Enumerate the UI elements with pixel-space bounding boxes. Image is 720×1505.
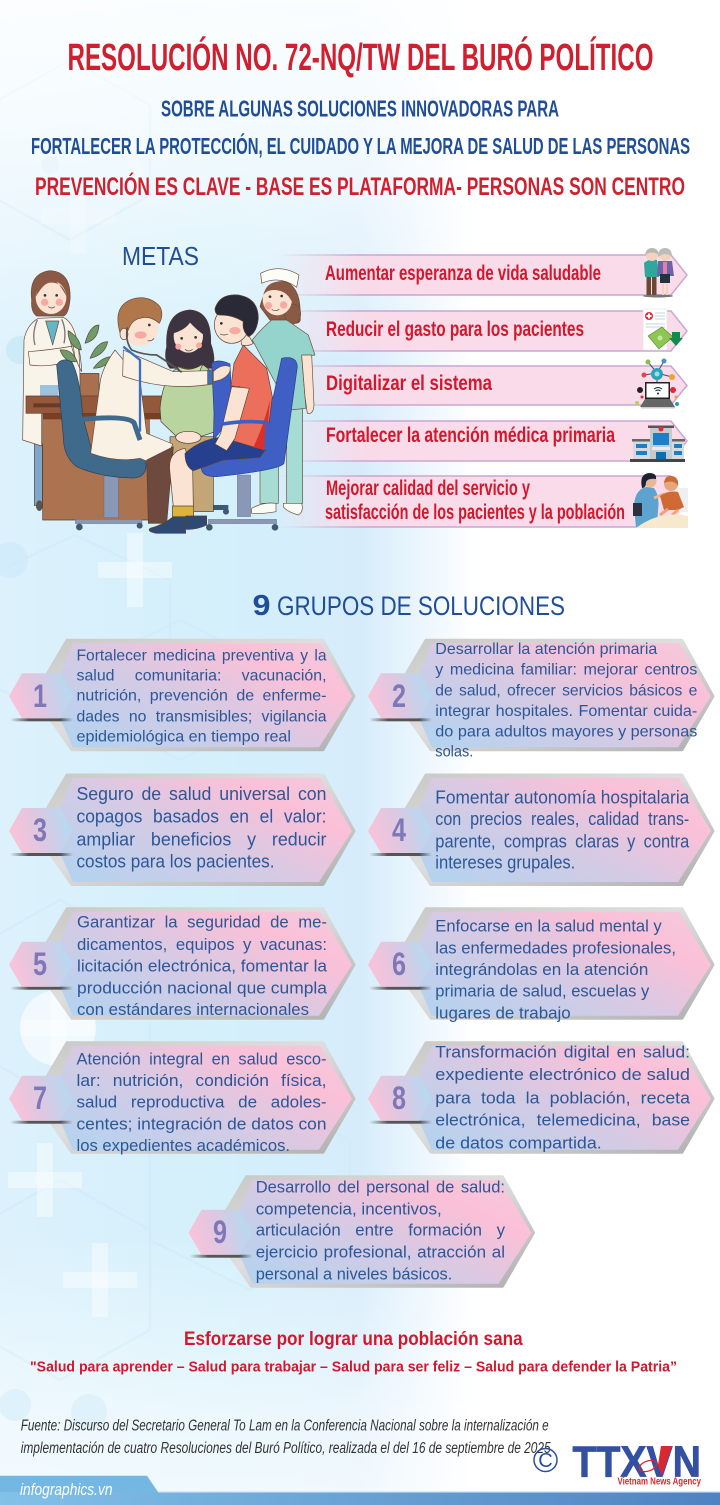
goal labels: Fortalecer la atención médica primaria [326, 424, 615, 447]
doctor armrest [83, 418, 140, 440]
heading: 9 grupos de soluciones: GRUPOS DE SOLUCIONES [277, 591, 565, 621]
panel 2 [368, 640, 713, 761]
closing slogan [30, 1329, 677, 1376]
closing slogan: "Salud para aprender – Salud para trabajar – Salud para ser feliz – Salud para defender la Patria” [30, 1360, 677, 1376]
source note: Fuente: Discurso del Secretario General To Lam en la Conferencia Nacional sobre la internalización e [21, 1418, 549, 1435]
panel 9 [188, 1177, 534, 1286]
panel 3: costos para los pacientes. [76, 851, 274, 871]
panel 7: centes; integración de datos con [76, 1114, 326, 1133]
panel 1 [9, 640, 354, 750]
copyright mark: C [538, 1450, 553, 1472]
panel 4: parente, compras claras y contra [435, 831, 690, 851]
panel 3: 3 [33, 812, 47, 848]
panel 2: de salud, ofrecer servicios básicos e [435, 682, 697, 699]
panel 1: epidemiológica en tiempo real [76, 729, 291, 746]
panel 9: articulación entre formación y [256, 1221, 505, 1240]
panel 3: copagos basados en el valor: [76, 807, 326, 827]
icon: elderly couple [643, 248, 674, 298]
panel 1: nutrición, prevención de enferme- [76, 688, 326, 705]
panel 7: Atención integral en salud esco- [76, 1049, 326, 1068]
panel 8: Transformación digital en salud: [435, 1043, 690, 1062]
panel 6: Enfocarse en la salud mental y [435, 917, 662, 936]
source note: implementación de cuatro Resoluciones del Buró Político, realizada el del 16 de septiembre de 2025 [21, 1440, 551, 1457]
panel 5: producción nacional que cumpla [77, 978, 328, 997]
girl [160, 310, 228, 512]
panel 2: integrar hospitales. Fomentar cuida- [435, 703, 697, 720]
panel 2: y medicina familiar: mejorar centros [435, 662, 697, 679]
panel 5: 5 [33, 946, 47, 982]
icon: digital network laptop [635, 358, 679, 408]
panel 9: competencia, incentivos, [256, 1199, 442, 1218]
plant [60, 325, 112, 397]
panel 2: solas. [435, 744, 473, 761]
panel 3 [9, 775, 354, 884]
copyright mark [534, 1448, 557, 1472]
panel 5: Garantizar la seguridad de me- [77, 913, 327, 932]
icon: hospital [630, 426, 685, 462]
source note [21, 1418, 551, 1457]
panel 4: con precios reales, calidad trans- [435, 809, 689, 829]
panel 3: ampliar beneficios y reducir [76, 829, 327, 849]
panel 4: Fomentar autonomía hospitalaria [435, 787, 690, 807]
panel 6: integrándolas en la atención [435, 960, 648, 979]
panel 5: licitación electrónica, fomentar la [77, 957, 328, 976]
panel 9: 9 [213, 1214, 227, 1250]
closing slogan: Esforzarse por lograr una población sana [184, 1329, 523, 1350]
doctor chair back and seat [57, 360, 146, 478]
doctor man [91, 298, 230, 468]
panel 1: Fortalecer medicina preventiva y la [76, 648, 327, 665]
panel 7: 7 [33, 1080, 47, 1116]
icon: medical bill and money [643, 309, 683, 350]
panel 8: expediente electrónico de salud [435, 1065, 690, 1084]
illustration: medical team with patient [23, 269, 315, 533]
panel 6: primaria de salud, escuelas y [435, 982, 650, 1001]
heading: metas: METAS [122, 241, 199, 271]
panel 6 [368, 909, 713, 1022]
desk [40, 385, 58, 397]
icon: nurse with patient [633, 473, 688, 528]
panel 6: 6 [392, 946, 406, 982]
goal labels: Mejorar calidad del servicio y [326, 477, 530, 500]
panel 6: lugares de trabajo [435, 1003, 571, 1022]
second blue chair back [212, 361, 232, 440]
panel 7: los expedientes académicos. [76, 1136, 290, 1155]
panel 8: electrónica, telemedicina, base [435, 1111, 690, 1130]
nurse [252, 269, 315, 515]
panel 1: dades no transmisibles; vigilancia [76, 708, 327, 725]
panel 9: personal a niveles básicos. [256, 1264, 452, 1283]
panel 5: dicamentos, equipos y vacunas: [77, 935, 327, 954]
panel 3: Seguro de salud universal con [76, 784, 326, 804]
boy chair [237, 475, 251, 517]
goal labels: Aumentar esperanza de vida saludable [325, 262, 601, 285]
panel 8: 8 [392, 1080, 406, 1116]
panel 9: Desarrollo del personal de salud: [256, 1177, 505, 1196]
panel 7: lar: nutrición, condición física, [76, 1071, 326, 1090]
panel 1: salud comunitaria: vacunación, [76, 668, 326, 685]
panel 4: 4 [392, 812, 406, 848]
panel 5 [9, 909, 354, 1019]
boy and legs [147, 295, 272, 533]
doctor chair [104, 476, 118, 518]
goal labels: Reducir el gasto para los pacientes [326, 318, 584, 341]
goal ribbons [277, 255, 687, 527]
panel 2: 2 [392, 678, 406, 714]
doctor woman [23, 271, 81, 511]
panel 1: 1 [33, 678, 47, 714]
panel 8: de datos compartida. [435, 1133, 602, 1152]
panel 7 [9, 1043, 354, 1155]
panel 4: intereses grupales. [435, 852, 575, 872]
heading: 9 grupos de soluciones: 9 [252, 590, 270, 622]
panel 7: salud reproductiva de adoles- [76, 1093, 326, 1112]
panel 9: ejercicio profesional, atracción al [256, 1243, 505, 1262]
logo: TTXVN: TTXVN [572, 1438, 701, 1487]
panel 8: para toda la población, receta [435, 1088, 691, 1107]
panel 8 [368, 1043, 713, 1152]
goal labels: Digitalizar el sistema [326, 372, 492, 395]
background [0, 59, 452, 1492]
subtitle [31, 96, 690, 159]
footer band: infographics.vn [20, 1480, 112, 1499]
footer band [0, 1476, 720, 1505]
panel 6: las enfermedades profesionales, [435, 938, 676, 957]
panel 5: con estándares internacionales [77, 1000, 309, 1019]
panel 2: do para adultos mayores y personas [435, 724, 697, 741]
goal labels [325, 262, 625, 524]
panel 4 [368, 775, 713, 884]
panel 2: Desarrollar la atención primaria [435, 641, 657, 658]
